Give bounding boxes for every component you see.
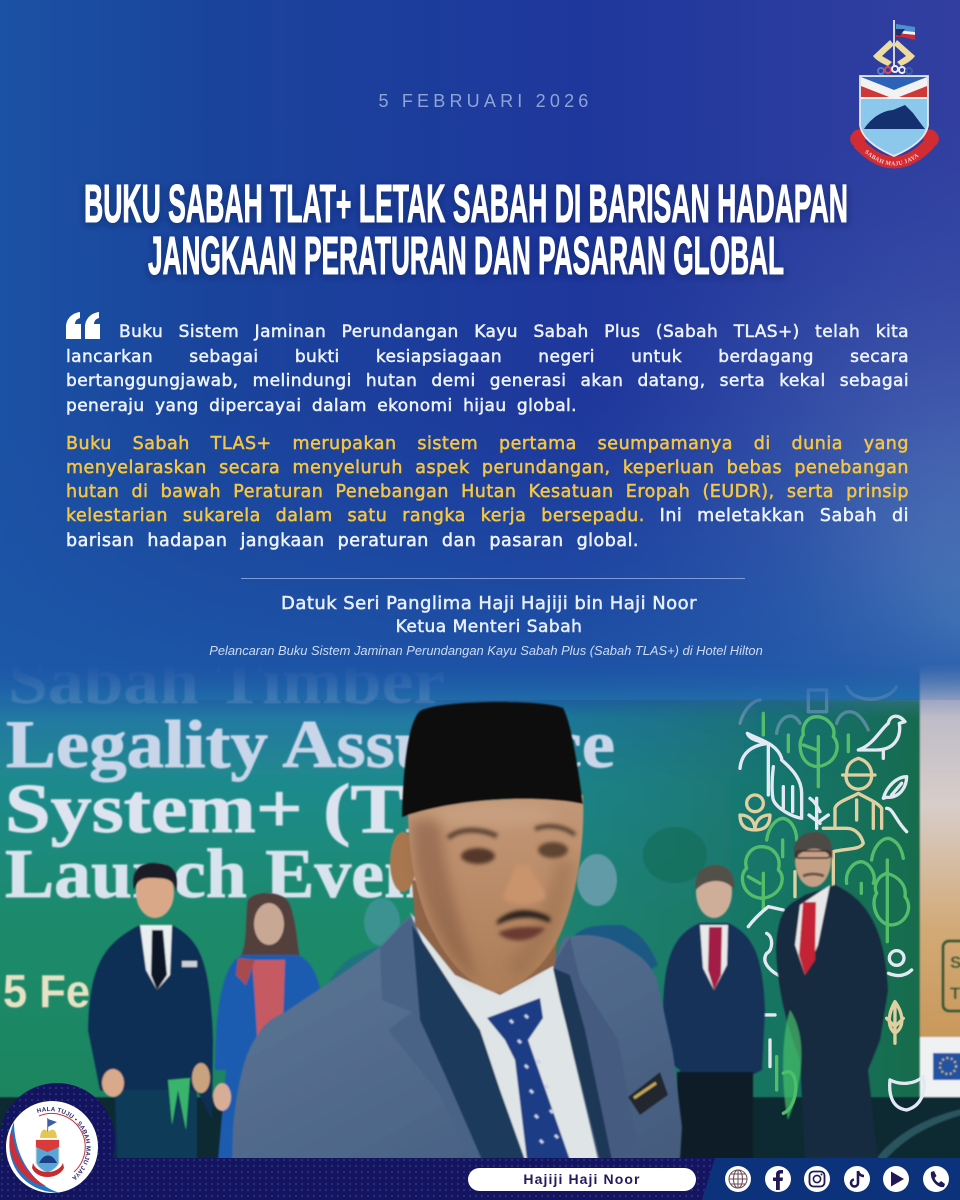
flag xyxy=(893,20,915,66)
divider xyxy=(241,578,745,579)
quote mark xyxy=(66,312,100,339)
speaker name: Datuk Seri Panglima Haji Hajiji bin Haji Noor xyxy=(281,593,697,614)
icon: phone xyxy=(923,1166,949,1192)
mini emblem xyxy=(32,1118,64,1177)
event photo backdrop xyxy=(0,645,960,1162)
background people xyxy=(88,832,888,1160)
date: 5 FEBRUARI 2026 xyxy=(378,91,593,111)
emblem: Sabah coat of arms xyxy=(850,20,939,168)
face shading xyxy=(412,805,575,982)
pill: name xyxy=(468,1168,696,1191)
person: woman in blue jacket xyxy=(213,893,322,1160)
arms holding flag xyxy=(873,40,915,66)
paragraph: highlight xyxy=(66,434,909,551)
torse xyxy=(878,66,912,74)
caption: Pelancaran Buku Sistem Jaminan Perundangan Kayu Sabah Plus (Sabah TLAS+) di Hotel Hilton xyxy=(209,643,763,658)
icon: globe xyxy=(725,1166,751,1192)
screen line icons xyxy=(740,687,924,1113)
person: man in dark suit xyxy=(88,863,213,1160)
screen title text: Legality Assurance xyxy=(6,706,615,782)
paragraph: statement xyxy=(66,322,909,416)
bottom bar xyxy=(0,1158,960,1200)
tie xyxy=(487,998,570,1160)
songkok xyxy=(402,702,583,817)
mountain xyxy=(864,105,925,129)
icon: facebook xyxy=(765,1166,791,1192)
paragraph: highlight: Buku Sabah TLAS+ merupakan sistem pertama seumpamanya di dunia yang xyxy=(66,434,909,454)
jacket xyxy=(232,915,682,1160)
icon: tiktok xyxy=(844,1166,870,1192)
facial features xyxy=(448,826,575,940)
person: man with burgundy tie xyxy=(663,865,765,1160)
paragraph: highlight: kelestarian sukarela dalam satu rangka kerja bersepadu. Ini meletakkan Sabah di xyxy=(66,506,909,526)
face xyxy=(408,795,583,993)
paragraph: statement: Buku Sistem Jaminan Perundangan Kayu Sabah Plus (Sabah TLAS+) telah kita xyxy=(119,322,909,342)
person: man with red tie and glasses xyxy=(776,832,888,1160)
motto ribbon: SABAH MAJU JAYA xyxy=(864,150,919,166)
person: faded man behind xyxy=(575,854,658,1000)
paragraph: highlight: hutan di bawah Peraturan Penebangan Hutan Kesatuan Eropah (EUDR), serta prinsip xyxy=(66,482,909,502)
badge: Hala Tuju xyxy=(0,1083,115,1193)
paragraph: statement: bertanggungjawab, melindungi hutan demi generasi akan datang, serta kekal sebagai xyxy=(66,371,909,391)
speaker role: Ketua Menteri Sabah xyxy=(396,617,582,637)
pill: name: Hajiji Haji Noor xyxy=(523,1171,641,1187)
shirt xyxy=(410,912,598,1160)
screen title text: 5 Fe xyxy=(3,965,90,1017)
motto ribbon xyxy=(850,129,939,168)
title xyxy=(82,174,850,286)
icon: play xyxy=(883,1166,909,1192)
neck xyxy=(412,880,560,995)
screen title text xyxy=(4,674,614,1008)
main figure: Chief Minister xyxy=(232,702,682,1160)
person: faded man far left xyxy=(330,898,400,1000)
badge: Hala Tuju: HALA TUJU • SABAH MAJU JAYA xyxy=(36,1106,91,1180)
screen title text: Sabah Timber xyxy=(8,645,445,718)
paragraph: highlight: barisan hadapan jangkaan peraturan dan pasaran global. xyxy=(66,531,639,551)
lapels xyxy=(380,917,525,1160)
icon: instagram xyxy=(804,1166,830,1192)
paragraph: statement: peneraju yang dipercayai dalam ekonomi hijau global. xyxy=(66,396,577,416)
paragraph: highlight: menyelaraskan secara menyeluruh aspek perundangan, keperluan bebas penebangan xyxy=(66,458,909,478)
ear xyxy=(390,832,416,892)
social icons xyxy=(725,1166,949,1192)
paragraph: statement: lancarkan sebagai bukti kesiapsiagaan negeri untuk berdagang secara xyxy=(66,347,909,367)
pocket badge xyxy=(628,1072,668,1115)
LED screen xyxy=(0,650,960,1162)
screen title text: Launch Even xyxy=(5,836,425,913)
screen title text: System+ (TL xyxy=(5,771,460,848)
shield xyxy=(860,76,928,156)
